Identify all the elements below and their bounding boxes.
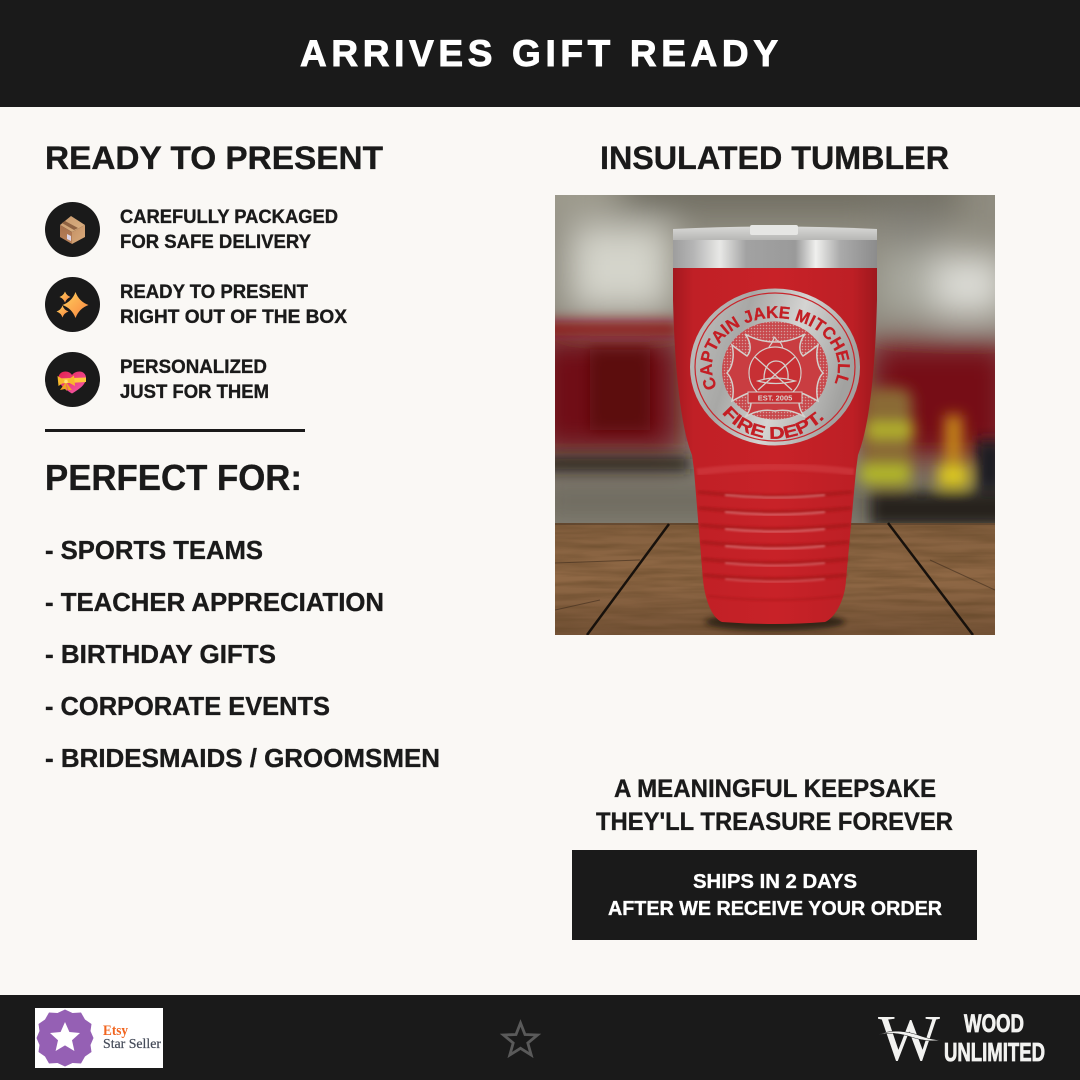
panel: perfect for (45, 457, 440, 773)
text: ready to present (120, 282, 347, 328)
tumbler body (673, 268, 877, 624)
text: star seller: Star Seller (103, 1036, 162, 1051)
list: occasions: - SPORTS TEAMS (45, 535, 263, 565)
tumbler steel rim (673, 240, 877, 268)
callout: shipping: SHIPS IN 2 DAYS (693, 871, 857, 893)
logo: wood unlimited (878, 1002, 1045, 1075)
closing statement (596, 775, 953, 836)
emblem: flame (768, 337, 783, 351)
emblem: maltese cross (722, 322, 828, 420)
panel: ready to present (45, 140, 383, 407)
tumbler ribs (697, 467, 854, 600)
icon: package box (45, 202, 100, 257)
list: occasions: - BIRTHDAY GIFTS (45, 639, 276, 669)
emblem: est banner (748, 392, 802, 403)
emblem text: fire dept: FIRE DEPT. (722, 406, 824, 439)
wood table (555, 523, 995, 635)
emblem: helmet and axes (755, 357, 795, 390)
text: personalized (120, 357, 269, 403)
feature: ready right out of the box (45, 277, 347, 332)
emblem text: name: CAPTAIN JAKE MITCHELL (700, 306, 850, 390)
icon: sparkles (45, 277, 100, 332)
heading: insulated tumbler: INSULATED TUMBLER (600, 140, 949, 176)
logo text: wood: WOOD (964, 1010, 1024, 1038)
text: etsy: Etsy (103, 1023, 128, 1039)
engraved fire department emblem (690, 288, 860, 446)
list: occasions: - TEACHER APPRECIATION (45, 587, 384, 617)
footer band (0, 995, 1080, 1080)
product photo: red tumbler on wood table (555, 195, 995, 635)
list: occasions: - BRIDESMAIDS / GROOMSMEN (45, 743, 440, 773)
title: ARRIVES GIFT READY (300, 33, 778, 74)
header band (0, 0, 1080, 107)
heading: ready to present: READY TO PRESENT (45, 140, 383, 176)
closing statement: A MEANINGFUL KEEPSAKE (614, 775, 936, 803)
emblem disc (690, 288, 860, 446)
callout: shipping (572, 850, 977, 940)
feature: personalized (45, 352, 269, 407)
text: ready to present: RIGHT OUT OF THE BOX (120, 307, 347, 328)
icon: outlined star (504, 1023, 538, 1055)
list: occasions (45, 535, 440, 773)
feature: carefully packaged (45, 202, 338, 257)
logo mark: W with swoosh: W (878, 1002, 941, 1075)
text: carefully packaged (120, 207, 338, 253)
text: carefully packaged: CAREFULLY PACKAGED (120, 207, 338, 228)
closing statement: THEY'LL TREASURE FOREVER (596, 808, 953, 836)
photo background: blurred fire station (555, 195, 995, 523)
text: personalized: JUST FOR THEM (120, 382, 269, 403)
icon: purple scalloped star badge (36, 1010, 94, 1066)
list: occasions: - CORPORATE EVENTS (45, 691, 330, 721)
table shadow (705, 613, 845, 631)
text: ready to present: READY TO PRESENT (120, 282, 308, 303)
emblem: est text: EST. 2005 (758, 394, 792, 402)
tumbler lid (673, 225, 877, 241)
icon: heart with ribbon (45, 352, 100, 407)
badge: etsy star seller (35, 1008, 163, 1068)
text: carefully packaged: FOR SAFE DELIVERY (120, 232, 311, 253)
callout: shipping: AFTER WE RECEIVE YOUR ORDER (608, 898, 943, 920)
tumbler (673, 225, 877, 624)
heading: perfect for: PERFECT FOR: (45, 457, 302, 498)
text: personalized: PERSONALIZED (120, 357, 267, 378)
